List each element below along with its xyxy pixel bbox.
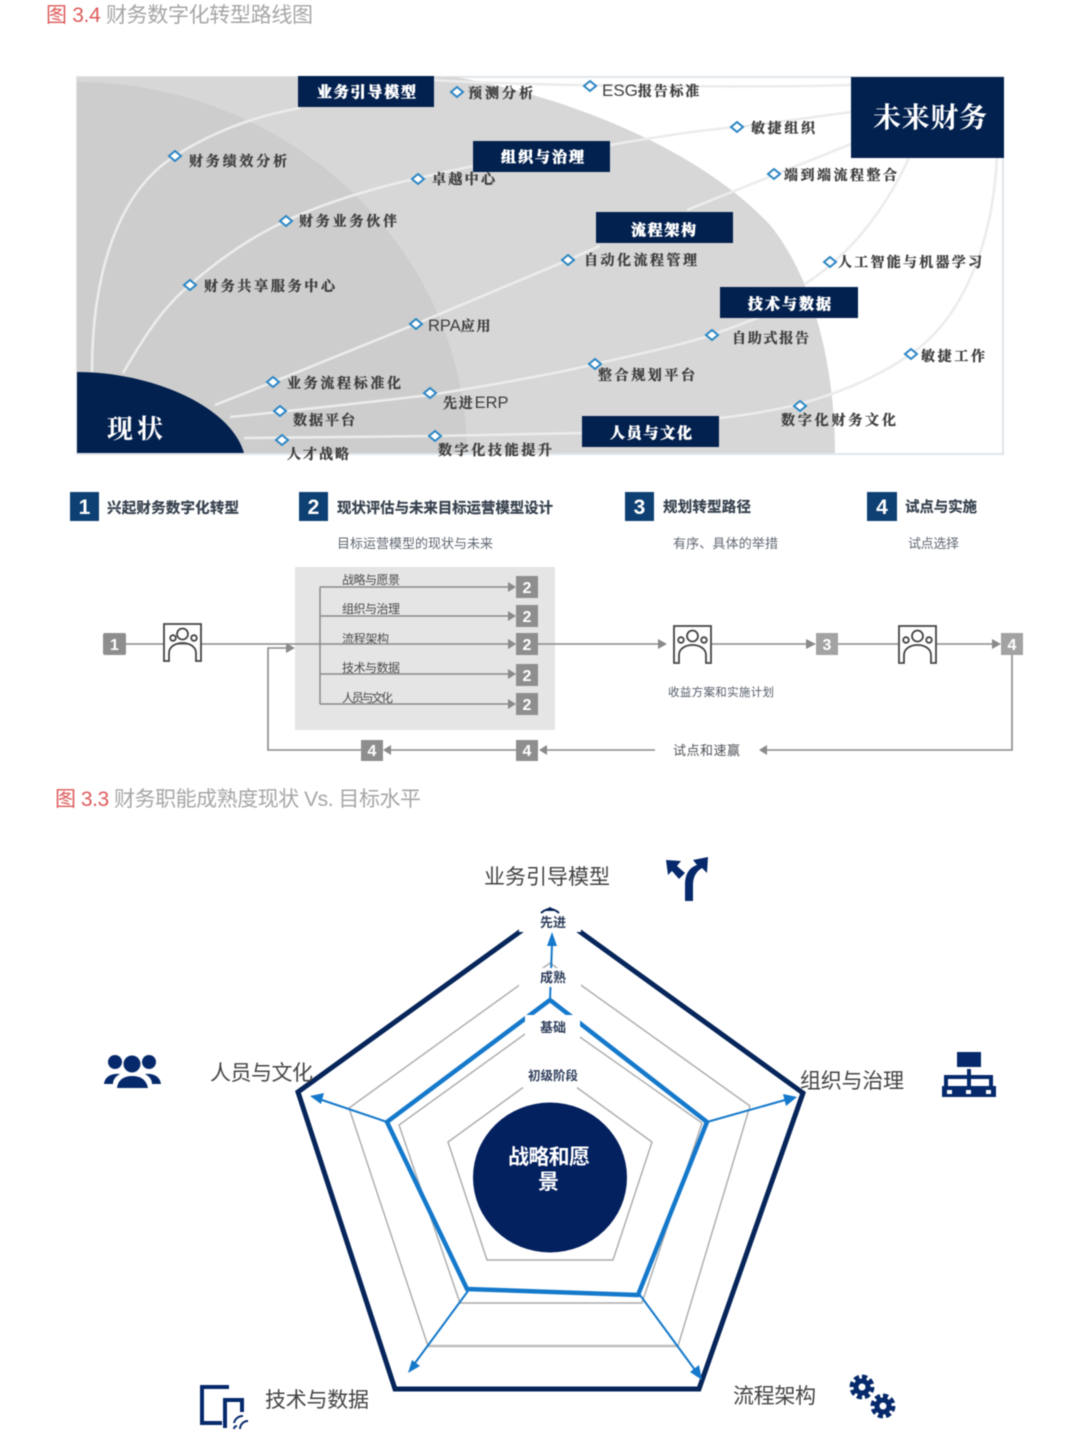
- tag: technology: 技术与数据: [748, 293, 831, 314]
- row: people: 2: [523, 697, 532, 714]
- row: process: [342, 631, 538, 655]
- icon: meeting 3: [899, 626, 936, 663]
- tag: people: 人员与文化: [610, 422, 692, 443]
- tag: organization: [473, 141, 610, 172]
- item: digital culture: 数字化财务文化: [781, 412, 896, 428]
- item: data platform: 数据平台: [293, 412, 356, 428]
- item: process standardization: 业务流程标准化: [287, 375, 401, 391]
- row: process: 流程架构: [342, 631, 389, 646]
- level: foundation: [525, 1015, 580, 1040]
- item: advanced ERP: [424, 388, 509, 412]
- item: self service reports: 自助式报告: [732, 330, 809, 346]
- row: strategy: 2: [523, 580, 532, 597]
- center circle: strategy and vision: [473, 1102, 627, 1252]
- marker 3: [816, 633, 838, 655]
- item: forecasting: 预测分析: [468, 85, 533, 101]
- row: technology: 技术与数据: [342, 660, 400, 675]
- item: centre of excellence: 卓越中心: [432, 171, 497, 187]
- step 3 heading: 3: [634, 496, 645, 519]
- row: organization: 组织与治理: [342, 602, 400, 616]
- item: talent strategy: [276, 435, 349, 462]
- step 3 heading: [625, 492, 751, 521]
- tag: people: [582, 416, 719, 447]
- step 2 heading: 现状评估与未来目标运营模型设计: [337, 499, 554, 517]
- item: integrated planning: [589, 359, 696, 383]
- icon: gears: [852, 1377, 893, 1416]
- step 1 heading: 兴起财务数字化转型: [107, 499, 239, 517]
- panel: roadmap from current state to future finance: [77, 76, 1004, 462]
- label: business model: 业务引导模型: [484, 866, 610, 889]
- item: digital skills: 数字化技能提升: [438, 442, 552, 458]
- item: RPA: RPA应用: [428, 317, 492, 335]
- marker 4 middle: 4: [523, 743, 532, 760]
- item: talent strategy: 人才战略: [287, 446, 349, 462]
- row: people: [342, 690, 538, 715]
- level: initial: [523, 1062, 578, 1088]
- arrowheads: [286, 639, 1001, 755]
- step 3 heading: 规划转型路径: [663, 499, 751, 516]
- item: agile working: 敏捷工作: [921, 348, 985, 364]
- item: end to end process: 端到端流程整合: [784, 167, 897, 183]
- maturity arrows: [310, 932, 797, 1380]
- tag: business model: 业务引导模型: [317, 81, 416, 102]
- marker 4 left: 4: [368, 743, 377, 760]
- step 2 subtitle: 目标运营模型的现状与未来: [337, 536, 493, 551]
- step 1 heading: [70, 492, 239, 521]
- row: organization: 2: [523, 609, 532, 626]
- label: people and culture: 人员与文化: [210, 1062, 313, 1085]
- item: ESG: ESG报告标准: [602, 81, 701, 100]
- tag: organization: 组织与治理: [501, 146, 584, 167]
- icon: meeting 1: [164, 624, 201, 661]
- current state block: [77, 372, 244, 453]
- item: digital skills: [429, 431, 552, 458]
- center circle: strategy and vision: 景: [538, 1171, 559, 1194]
- future finance block: [851, 77, 1004, 158]
- item: automation: 自动化流程管理: [584, 252, 697, 268]
- tag: process: 流程架构: [631, 219, 696, 240]
- row: strategy: 战略与愿景: [342, 572, 400, 587]
- item: integrated planning: 整合规划平台: [598, 367, 696, 383]
- step 4 subtitle: 试点选择: [908, 536, 959, 551]
- item: AI and ML: 人工智能与机器学习: [838, 254, 982, 270]
- step 1 heading: 1: [79, 496, 91, 519]
- panel: operating model dimensions: [295, 567, 555, 730]
- step 4 heading: [867, 492, 978, 521]
- tag: process: [596, 212, 733, 243]
- flow arrows: [126, 644, 1012, 750]
- marker 4 right: [1001, 633, 1023, 655]
- level: mature: [519, 968, 581, 987]
- tag: technology: [720, 287, 858, 318]
- step 3 subtitle: 有序、具体的举措: [673, 536, 778, 551]
- future finance block: 未来财务: [873, 96, 987, 136]
- row: strategy: [342, 572, 538, 598]
- icon: forked road arrows: [666, 857, 708, 901]
- icon: people group: [104, 1055, 161, 1088]
- title: figure 3.4: 图 3.4 财务数字化转型路线图: [46, 4, 313, 27]
- tag: business model: [298, 76, 434, 107]
- current state block: 现状: [107, 409, 164, 446]
- row: organization: [342, 602, 538, 627]
- marker 1: 1: [110, 637, 119, 654]
- radar chart: maturity pentagon: [298, 909, 803, 1389]
- label: process architecture: 流程架构: [733, 1385, 816, 1408]
- marker 3: 3: [823, 637, 832, 654]
- item: shared service centre: 财务共享服务中心: [204, 278, 337, 294]
- level: initial: 初级阶段: [528, 1068, 578, 1083]
- icon: devices with wifi: [202, 1387, 248, 1429]
- marker 1: [103, 633, 126, 655]
- icon: meeting 2: [674, 626, 711, 663]
- step 2 heading: [299, 492, 554, 521]
- step 4 heading: 试点与实施: [905, 498, 978, 516]
- center circle: strategy and vision: 战略和愿: [508, 1146, 590, 1169]
- label: technology and data: 技术与数据: [265, 1389, 369, 1412]
- item: advanced ERP: 先进ERP: [443, 394, 509, 412]
- level: advanced: [519, 909, 581, 932]
- item: performance analysis: 财务绩效分析: [189, 153, 287, 169]
- item: data platform: [274, 406, 356, 428]
- level: advanced: 先进: [540, 915, 566, 930]
- item: digital culture: [781, 401, 896, 428]
- marker 4 middle: [516, 740, 538, 761]
- row: process: 2: [523, 637, 532, 654]
- row: technology: [342, 660, 538, 686]
- icon: org chart: [942, 1052, 996, 1097]
- level: foundation: 基础: [540, 1020, 566, 1035]
- marker 4 left: [361, 740, 383, 761]
- row: people: 人员与文化: [342, 690, 393, 705]
- caption: benefit plan: 收益方案和实施计划: [668, 685, 774, 699]
- caption: pilots and quick wins: 试点和速赢: [673, 743, 740, 758]
- level: mature: 成熟: [540, 970, 566, 985]
- title: figure 3.3: 图 3.3 财务职能成熟度现状 Vs. 目标水平: [55, 788, 421, 811]
- item: business partner: 财务业务伙伴: [299, 213, 397, 229]
- item: agile organization: 敏捷组织: [751, 120, 817, 137]
- marker 4 right: 4: [1008, 637, 1017, 654]
- row: technology: 2: [523, 668, 532, 685]
- step 2 heading: 2: [308, 496, 319, 519]
- step 4 heading: 4: [876, 496, 888, 519]
- label: organization and governance: 组织与治理: [800, 1070, 904, 1093]
